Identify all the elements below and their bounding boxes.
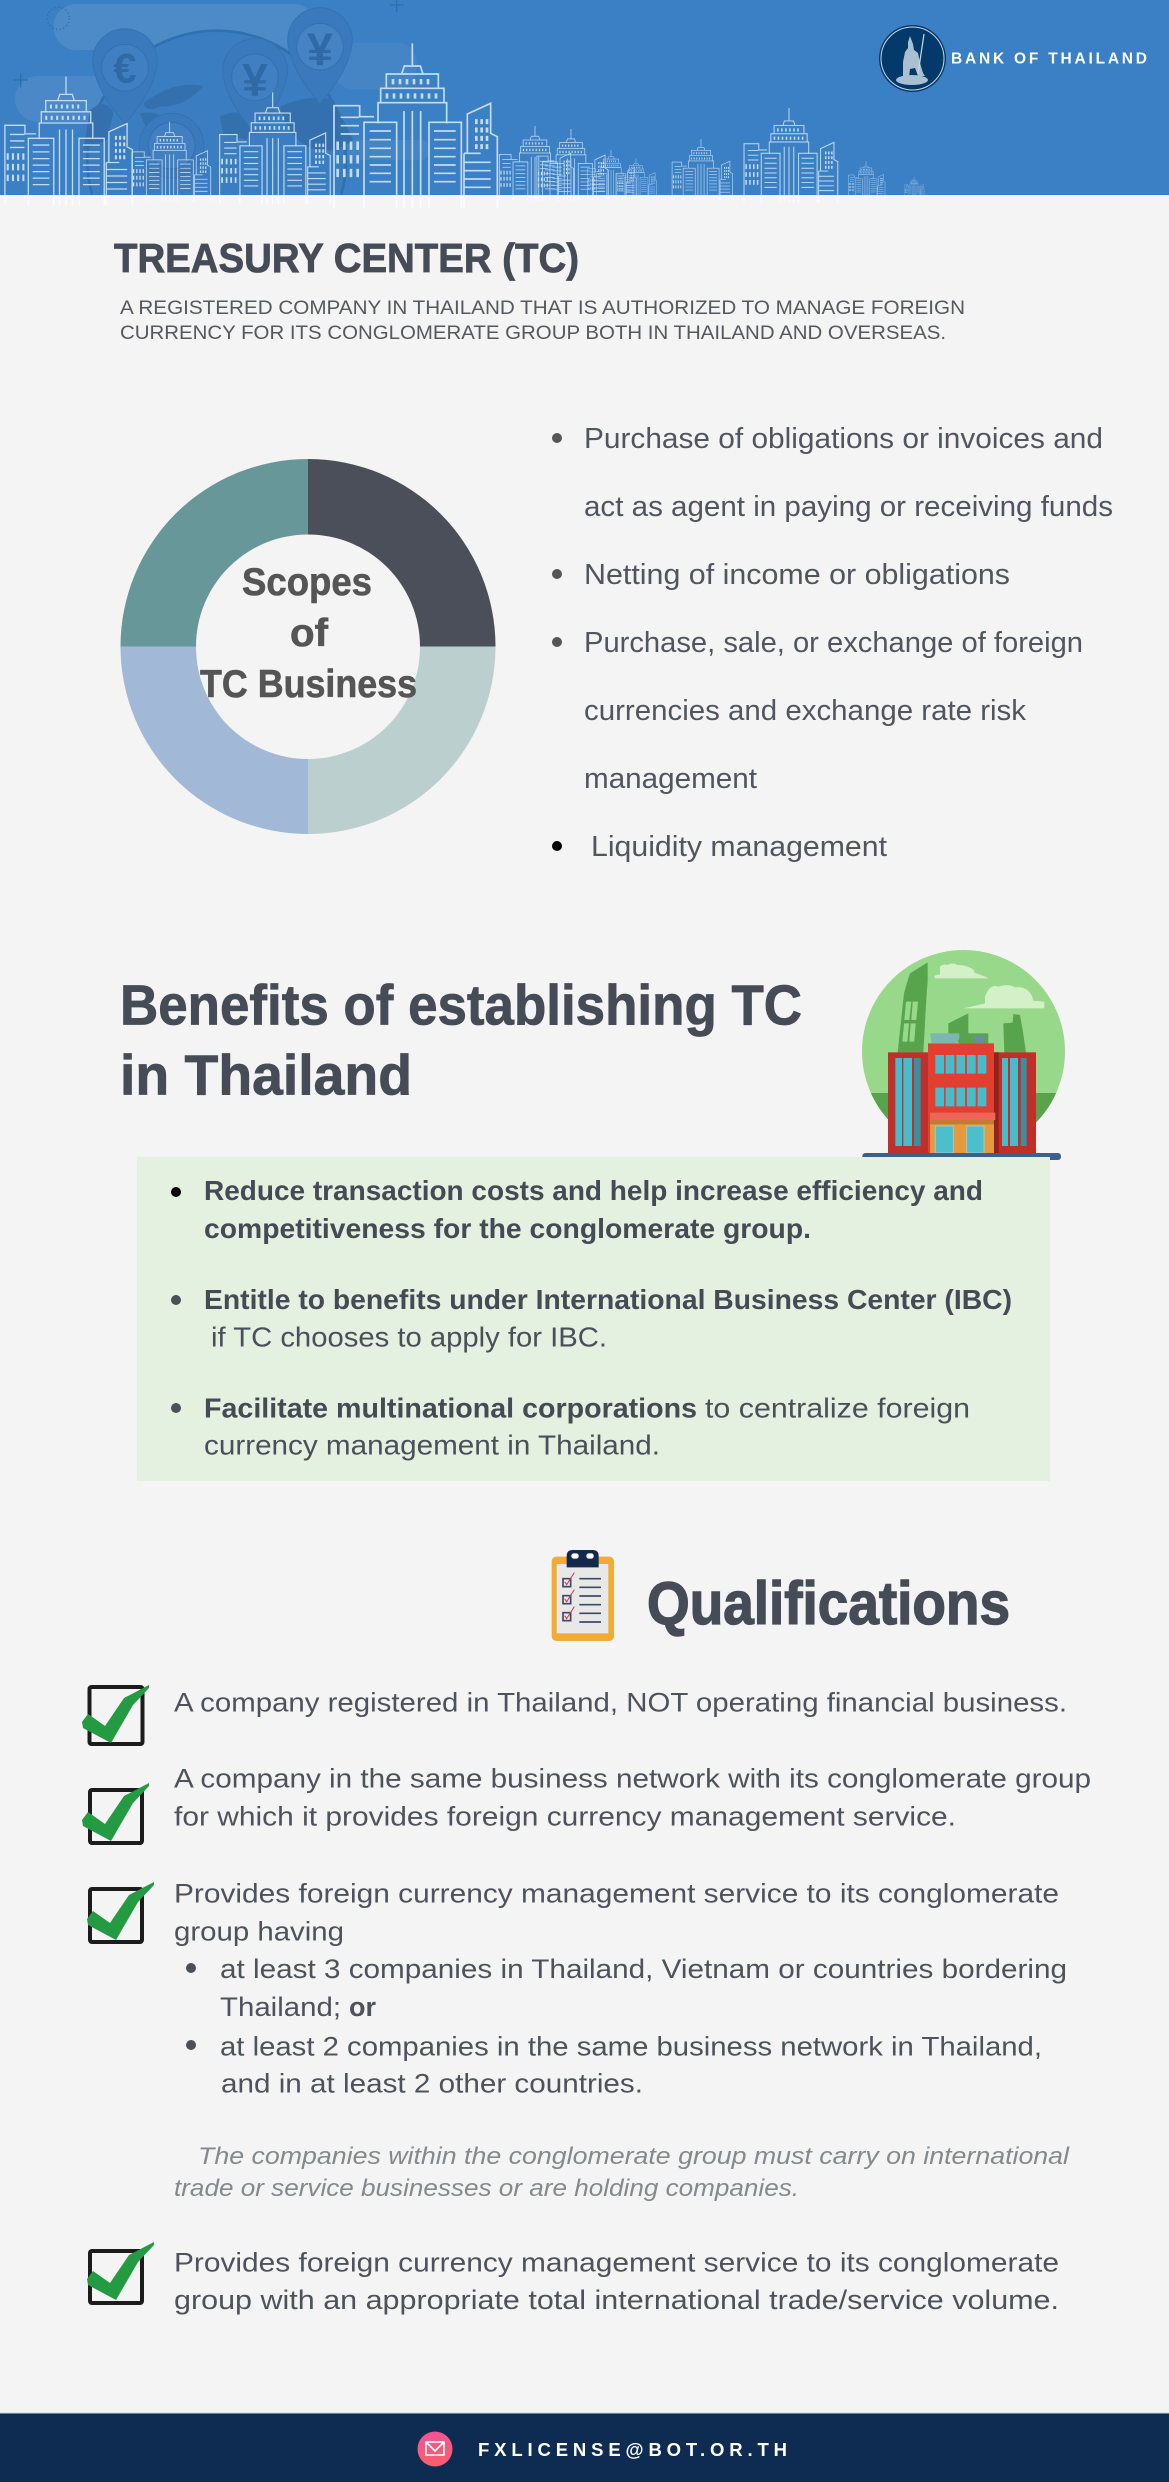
subtitle: CURRENCY FOR ITS CONGLOMERATE GROUP BOTH IN THAILAND AND OVERSEAS. [120, 322, 946, 344]
qualification 3: or [349, 1992, 376, 2022]
qualification 4: group with an appropriate total international trade/service volume. [174, 2285, 1059, 2315]
icon: clipboard [552, 1550, 614, 1641]
qualification 1: A company registered in Thailand, NOT operating financial business. [174, 1688, 1067, 1718]
panel: benefits list: Facilitate multinational corporations [204, 1392, 697, 1424]
scopes bullet list: management [584, 763, 757, 795]
icon: office building [860, 950, 1070, 1160]
scopes bullet list: Purchase of obligations or invoices and [584, 423, 1103, 455]
qualification 2 [82, 1764, 1091, 1843]
qualification 3: at least 3 companies in Thailand, Vietnam or countries bordering [220, 1954, 1067, 1984]
qualification 2: for which it provides foreign currency management service. [174, 1802, 956, 1832]
panel: benefits list: competitiveness for the conglomerate group. [204, 1213, 811, 1244]
banner world map and currency pins [14, 0, 428, 195]
scopes bullet list [552, 423, 1113, 863]
qualification 3: Thailand; [220, 1992, 341, 2022]
qualification 1 [82, 1685, 1067, 1744]
donut chart: scopes of TC business [120, 459, 496, 834]
bank name: BANK OF THAILAND [951, 50, 1147, 68]
qualification 3 [87, 1878, 1067, 2098]
contact email: FXLICENSE@BOT.OR.TH [478, 2439, 787, 2460]
bank of thailand logo [879, 25, 1147, 92]
panel: benefits list: to centralize foreign [705, 1392, 970, 1424]
panel: benefits list: if TC chooses to apply for IBC. [211, 1322, 607, 1352]
donut center label [200, 561, 417, 706]
qualification 3: Provides foreign currency management service to its conglomerate [174, 1878, 1059, 1908]
benefits heading: Benefits of establishing TC [120, 974, 802, 1038]
italic note: The companies within the conglomerate group must carry on international [198, 2143, 1070, 2170]
benefits heading: in Thailand [120, 1044, 412, 1108]
panel: benefits list: Reduce transaction costs and help increase efficiency and [204, 1175, 983, 1206]
scopes bullet list: Liquidity management [591, 831, 887, 863]
scopes bullet list: act as agent in paying or receiving funds [584, 491, 1113, 523]
panel: benefits list: currency management in Thailand. [204, 1430, 660, 1460]
benefits heading [120, 974, 802, 1108]
donut center label: TC Business [200, 663, 417, 706]
donut center label: of [290, 612, 329, 655]
panel: benefits list [137, 1157, 1050, 1481]
panel: benefits list: Entitle to benefits under International Business Center (IBC) [204, 1284, 1012, 1315]
qualification 3: group having [174, 1916, 344, 1946]
skyline fade below banner [28, 195, 819, 208]
scopes bullet list: Purchase, sale, or exchange of foreign [584, 627, 1083, 659]
qualification 4 [87, 2242, 1059, 2315]
qualification 3: at least 2 companies in the same business network in Thailand, [220, 2032, 1042, 2062]
skyline illustration [5, 43, 924, 208]
italic note: trade or service businesses or are holding companies. [174, 2175, 799, 2202]
banner world map and currency pins: ¥ [307, 24, 333, 76]
icon: email [418, 2432, 452, 2466]
footer bar [0, 2412, 1169, 2482]
scopes bullet list: Netting of income or obligations [584, 559, 1010, 591]
italic note [174, 2143, 1070, 2202]
donut center label: Scopes [242, 561, 372, 604]
subtitle [120, 297, 965, 344]
banner world map and currency pins: ¥ [242, 54, 268, 106]
subtitle: A REGISTERED COMPANY IN THAILAND THAT IS AUTHORIZED TO MANAGE FOREIGN [120, 297, 965, 319]
qualification 4: Provides foreign currency management service to its conglomerate [174, 2248, 1059, 2278]
title: TREASURY CENTER (TC) [114, 235, 579, 281]
header banner [0, 0, 1169, 195]
qualification 3: and in at least 2 other countries. [221, 2068, 643, 2098]
qualifications heading: Qualifications [647, 1570, 1010, 1637]
scopes bullet list: currencies and exchange rate risk [584, 695, 1026, 727]
qualification 2: A company in the same business network with its conglomerate group [174, 1764, 1091, 1794]
banner world map and currency pins: € [113, 45, 137, 92]
